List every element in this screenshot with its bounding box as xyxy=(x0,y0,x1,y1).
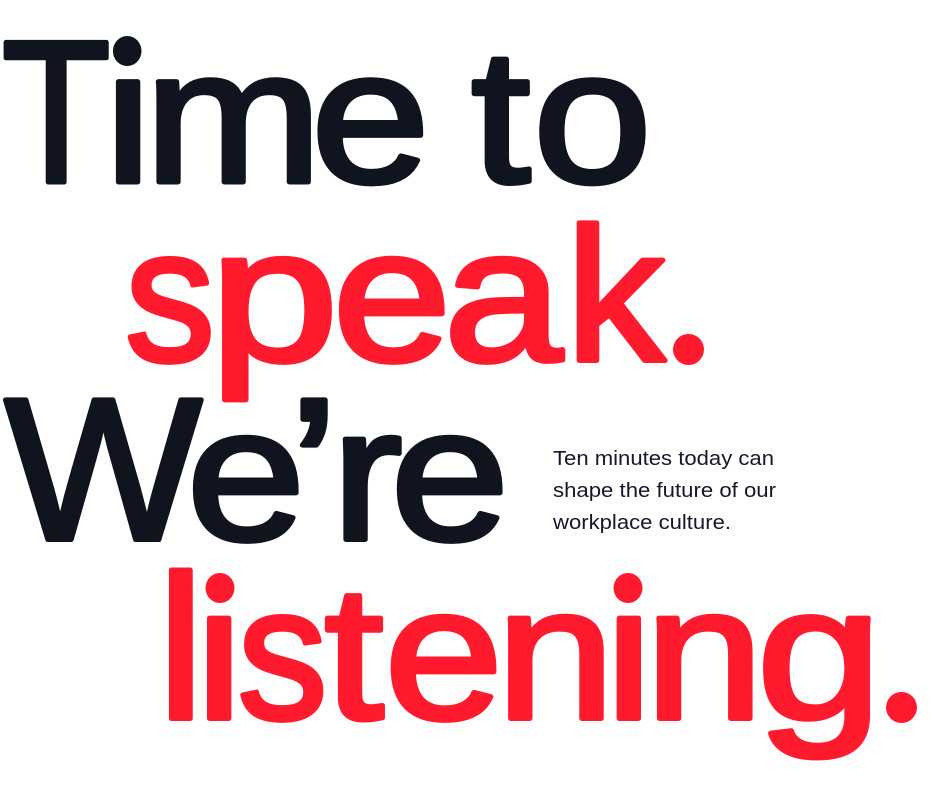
text block: intro copy: workplace culture. xyxy=(552,512,731,534)
heading: speak. xyxy=(125,188,715,401)
heading: listening. xyxy=(157,534,928,763)
text block: intro copy xyxy=(552,448,776,534)
heading: Time to: T xyxy=(2,0,111,225)
heading: listening.: . xyxy=(875,562,928,752)
heading: listening.: tenin xyxy=(324,546,764,759)
heading: listening.: s xyxy=(238,546,327,759)
heading: We're: e xyxy=(187,367,305,580)
heading: We're: re xyxy=(331,367,509,580)
heading: speak.: p xyxy=(209,188,339,401)
heading: speak.: . xyxy=(662,204,715,394)
heading: listening.: l xyxy=(157,534,204,763)
heading: listening.: g xyxy=(757,546,882,759)
heading: Time to: ime to xyxy=(104,10,652,222)
heading: We're: W xyxy=(5,356,202,583)
heading: We're: ’ xyxy=(288,356,339,583)
text block: intro copy: Ten minutes today can xyxy=(553,448,774,470)
heading: speak.: s xyxy=(125,188,215,401)
heading: listening.: i xyxy=(196,546,243,759)
heading: speak.: ea xyxy=(333,188,563,401)
text block: intro copy: shape the future of our xyxy=(553,480,776,502)
heading: speak.: k xyxy=(566,188,666,401)
